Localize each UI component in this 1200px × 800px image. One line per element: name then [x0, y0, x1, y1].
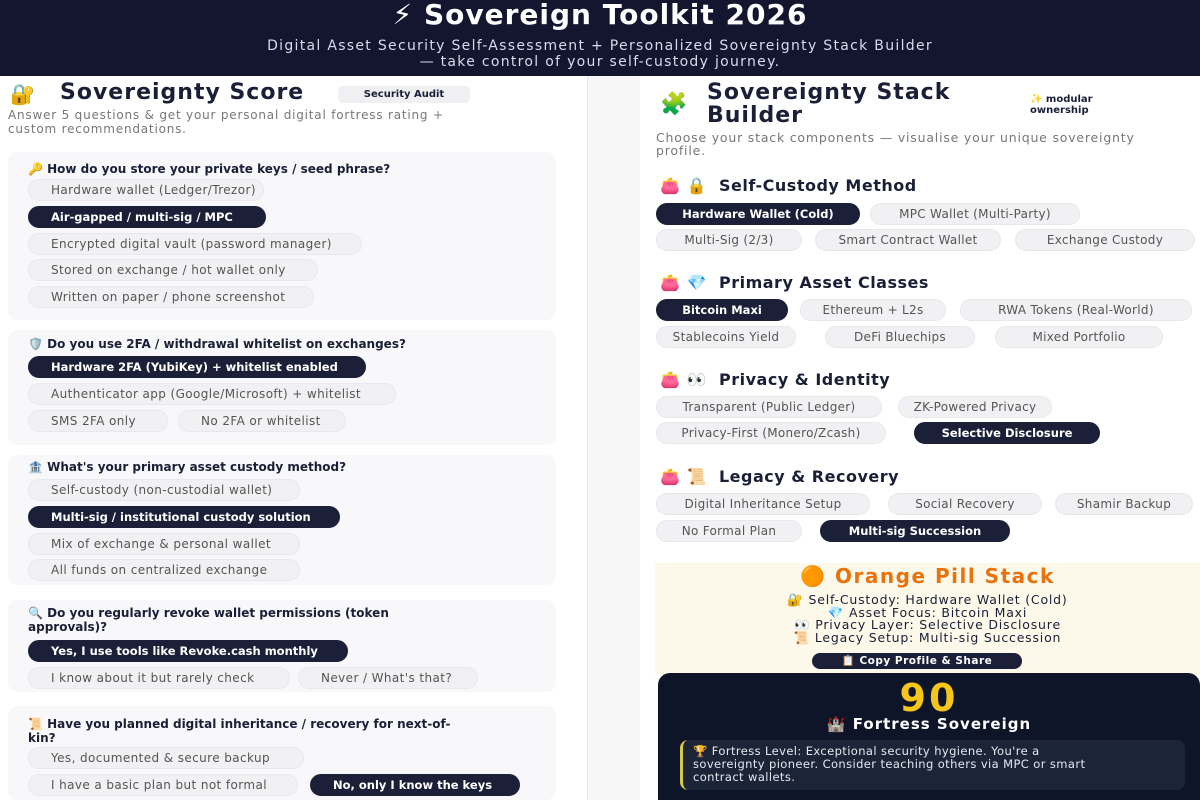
- question 4: [8, 600, 556, 692]
- question 1: Air-gapped / multi-sig / MPC: [51, 210, 233, 224]
- badge: [338, 86, 470, 103]
- question 2: Authenticator app (Google/Microsoft) + whitelist: [51, 387, 361, 401]
- section: legacy: 👛 📜 Legacy & Recovery: [660, 467, 899, 486]
- panel: stack builder: [640, 76, 1200, 800]
- badge: Security Audit: [364, 89, 444, 100]
- section: privacy: 👛 👀 Privacy & Identity: [660, 370, 890, 389]
- question 5: No, only I know the keys: [333, 778, 492, 792]
- profile list: [787, 592, 1068, 644]
- question 1: Hardware wallet (Ledger/Trezor): [51, 183, 256, 197]
- text: RWA Tokens (Real-World): [998, 303, 1154, 317]
- question 5: Yes, documented & secure backup: [51, 751, 270, 765]
- subtitle: [267, 38, 933, 70]
- text: ZK-Powered Privacy: [914, 400, 1036, 414]
- text: Bitcoin Maxi: [682, 303, 762, 317]
- question 5: 📜 Have you planned digital inheritance / recovery for next-of-kin?: [28, 717, 450, 745]
- text: Privacy-First (Monero/Zcash): [681, 426, 861, 440]
- text: Social Recovery: [915, 497, 1015, 511]
- description: Choose your stack components — visualise your unique sovereignty profile.: [656, 130, 1135, 158]
- text: Multi-Sig (2/3): [684, 233, 774, 247]
- question 4: Never / What's that?: [321, 671, 452, 685]
- question 1: [8, 152, 556, 320]
- subtitle: — take control of your self-custody journey.: [420, 54, 780, 70]
- text: Ethereum + L2s: [822, 303, 924, 317]
- callout: [680, 740, 1185, 790]
- badge: modular ownership: [1030, 93, 1093, 116]
- section: asset classes: 👛 💎 Primary Asset Classes: [660, 273, 929, 292]
- score number: 90: [900, 676, 958, 720]
- question 4: 🔍 Do you regularly revoke wallet permissions (token approvals)?: [28, 606, 389, 634]
- question 1: 🔑 How do you store your private keys / seed phrase?: [28, 162, 390, 176]
- text: Digital Inheritance Setup: [684, 497, 842, 511]
- question 5: [8, 706, 556, 800]
- question 3: [8, 455, 556, 585]
- icon: puzzle: 🧩: [660, 92, 687, 117]
- question 3: 🏦 What's your primary asset custody method?: [28, 460, 346, 474]
- panel: orange pill stack: [655, 563, 1200, 675]
- profile list: 💎 Asset Focus: Bitcoin Maxi: [828, 604, 1027, 620]
- question 2: Hardware 2FA (YubiKey) + whitelist enabled: [51, 360, 338, 374]
- heading: Sovereignty Score: [60, 80, 304, 105]
- profile list: 👀 Privacy Layer: Selective Disclosure: [794, 617, 1061, 632]
- profile list: 🔐 Self-Custody: Hardware Wallet (Cold): [787, 592, 1068, 607]
- question 1: Encrypted digital vault (password manager): [51, 237, 332, 251]
- question 2: SMS 2FA only: [51, 414, 136, 428]
- text: Multi-sig Succession: [849, 524, 981, 538]
- subtitle: Digital Asset Security Self-Assessment + Personalized Sovereignty Stack Builder: [267, 38, 933, 54]
- question 2: 🛡️ Do you use 2FA / withdrawal whitelist on exchanges?: [28, 337, 406, 351]
- icon: lock: 🔐: [10, 82, 35, 106]
- question 2: [8, 330, 556, 445]
- button: [812, 653, 1022, 669]
- description: Answer 5 questions & get your personal digital fortress rating + custom recommendations.: [8, 108, 444, 136]
- text: Exchange Custody: [1047, 233, 1163, 247]
- question 3: All funds on centralized exchange: [51, 563, 267, 577]
- text: No Formal Plan: [682, 524, 776, 538]
- callout: 🏆 Fortress Level: Exceptional security hygiene. You're a sovereignty pioneer. Consider teaching others via MPC or smart contract wallets.: [693, 744, 1085, 784]
- panel: sovereignty score: [0, 76, 588, 800]
- text: Smart Contract Wallet: [838, 233, 978, 247]
- question 5: I have a basic plan but not formal: [51, 778, 267, 792]
- question 1: Written on paper / phone screenshot: [51, 290, 285, 304]
- text: DeFi Bluechips: [854, 330, 946, 344]
- heading: stack builder: Builder: [707, 103, 803, 128]
- badge: modular ownership: ✨ modular: [1030, 94, 1093, 105]
- question 4: Yes, I use tools like Revoke.cash monthly: [51, 644, 318, 658]
- button: 📋 Copy Profile & Share: [842, 655, 992, 667]
- text: Mixed Portfolio: [1032, 330, 1126, 344]
- question 3: Mix of exchange & personal wallet: [51, 537, 271, 551]
- text: Stablecoins Yield: [673, 330, 779, 344]
- heading: stack builder: Sovereignty Stack: [707, 80, 950, 105]
- rating: 🏰 Fortress Sovereign: [827, 715, 1031, 733]
- heading: 🟠 Orange Pill Stack: [800, 564, 1055, 588]
- text: Selective Disclosure: [942, 426, 1072, 440]
- panel: score: [658, 673, 1200, 800]
- section: self-custody: 👛 🔒 Self-Custody Method: [660, 176, 917, 195]
- header: [0, 0, 1200, 76]
- text: Transparent (Public Ledger): [682, 400, 856, 414]
- text: Hardware Wallet (Cold): [682, 207, 834, 221]
- badge: modular ownership: ownership: [1030, 105, 1089, 116]
- text: MPC Wallet (Multi-Party): [899, 207, 1051, 221]
- text: Shamir Backup: [1077, 497, 1171, 511]
- heading: stack builder: [707, 80, 950, 128]
- question 3: Self-custody (non-custodial wallet): [51, 483, 272, 497]
- profile list: 📜 Legacy Setup: Multi-sig Succession: [794, 630, 1061, 644]
- question 4: I know about it but rarely check: [51, 671, 254, 685]
- question 3: Multi-sig / institutional custody solution: [51, 510, 311, 524]
- question 1: Stored on exchange / hot wallet only: [51, 263, 286, 277]
- question 2: No 2FA or whitelist: [201, 414, 321, 428]
